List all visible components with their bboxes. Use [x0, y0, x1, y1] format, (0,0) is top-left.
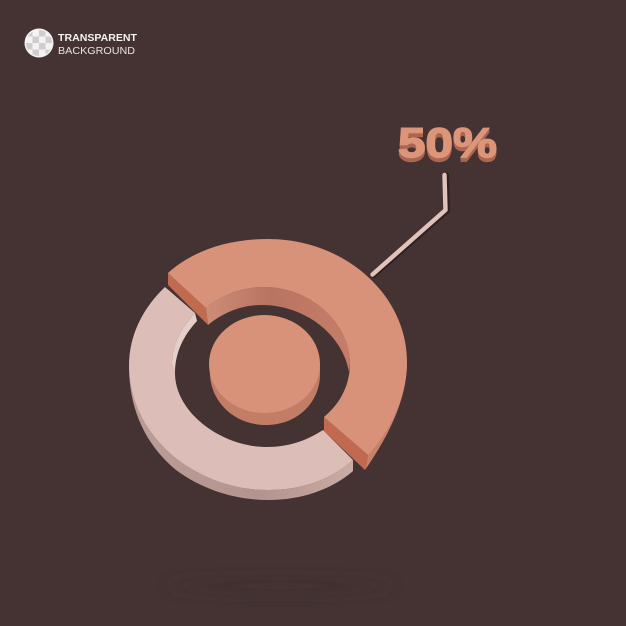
leader line — [372, 175, 448, 276]
label: 50%: 50% — [398, 119, 497, 166]
orange outer side wall — [365, 362, 407, 470]
orange inner wall — [206, 287, 350, 372]
pink top face — [129, 287, 353, 490]
orange top face — [168, 239, 407, 455]
segment: pink 50 percent — [129, 287, 353, 500]
disc top — [209, 315, 320, 413]
badge text — [58, 32, 138, 57]
center disc — [209, 315, 320, 425]
infographic canvas — [24, 28, 496, 500]
badge text: TRANSPARENT — [58, 32, 138, 44]
orange end cap bottom — [324, 417, 368, 470]
orange end cap top — [168, 273, 208, 325]
pink outer side wall — [129, 366, 353, 500]
ground shadow — [165, 582, 395, 590]
badge: transparent background — [24, 28, 138, 58]
segment: orange 50 percent — [168, 239, 407, 470]
label: 50%: 50% — [398, 121, 497, 168]
donut chart — [129, 239, 407, 500]
pink inner side wall — [172, 313, 197, 373]
disc side — [210, 364, 320, 425]
label: 50%: 50% — [398, 123, 497, 170]
badge text: BACKGROUND — [58, 45, 135, 57]
icon: checkerboard circle — [24, 28, 54, 58]
